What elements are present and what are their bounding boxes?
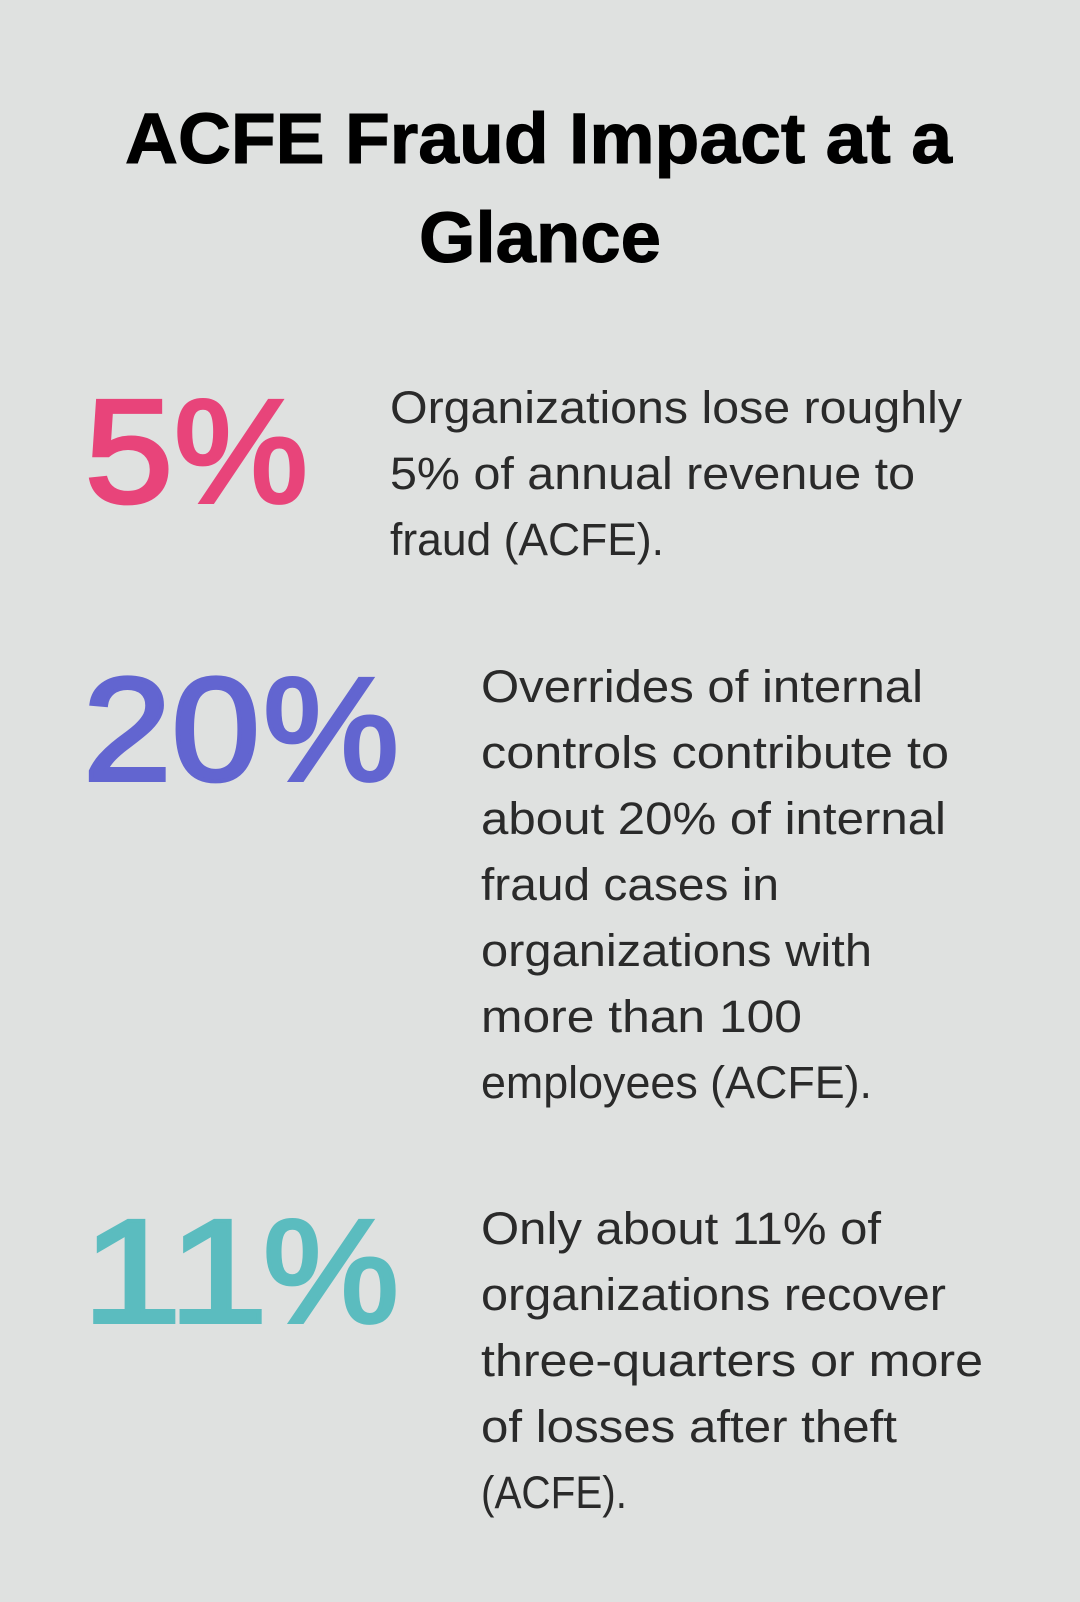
big number: 11% — [82, 1190, 399, 1354]
big number: 20%: 20 — [83, 648, 260, 812]
text block: 20% description: organizations with — [481, 925, 872, 976]
big number: 5% — [85, 370, 308, 534]
text block: 20% description: Overrides of internal — [481, 661, 923, 712]
text block: 20% description: more than 100 — [481, 991, 802, 1042]
text block: 5% description — [390, 382, 963, 565]
title — [125, 100, 953, 278]
text block: 5% description: fraud (ACFE). — [390, 514, 664, 565]
big number: 20% — [83, 648, 399, 812]
title: Glance — [419, 199, 661, 278]
big number: 11%: 11 — [82, 1190, 268, 1354]
big number: 5%: % — [174, 370, 308, 534]
text block: 11% description: Only about 11% of — [481, 1203, 882, 1254]
text block: 20% description — [481, 661, 949, 1108]
panel: 11% statistic — [82, 1190, 983, 1518]
text block: 20% description: controls contribute to — [481, 727, 949, 778]
text block: 11% description — [481, 1203, 983, 1518]
text block: 11% description: (ACFE). — [481, 1467, 627, 1518]
big number: 11%: % — [263, 1190, 399, 1354]
text block: 20% description: fraud cases in — [481, 859, 779, 910]
text block: 5% description: 5% of annual revenue to — [390, 448, 915, 499]
text block: 5% description: Organizations lose roughly — [390, 382, 963, 433]
text block: 11% description: of losses after theft — [481, 1401, 898, 1452]
panel: 20% statistic — [83, 648, 949, 1108]
panel: 5% statistic — [85, 370, 963, 565]
text block: 11% description: organizations recover — [481, 1269, 946, 1320]
text block: 11% description: three-quarters or more — [481, 1335, 983, 1386]
big number: 5%: 5 — [85, 370, 173, 534]
text block: 20% description: about 20% of internal — [481, 793, 946, 844]
text block: 20% description: employees (ACFE). — [481, 1057, 872, 1108]
big number: 20%: % — [263, 648, 399, 812]
title: ACFE Fraud Impact at a — [125, 100, 953, 179]
